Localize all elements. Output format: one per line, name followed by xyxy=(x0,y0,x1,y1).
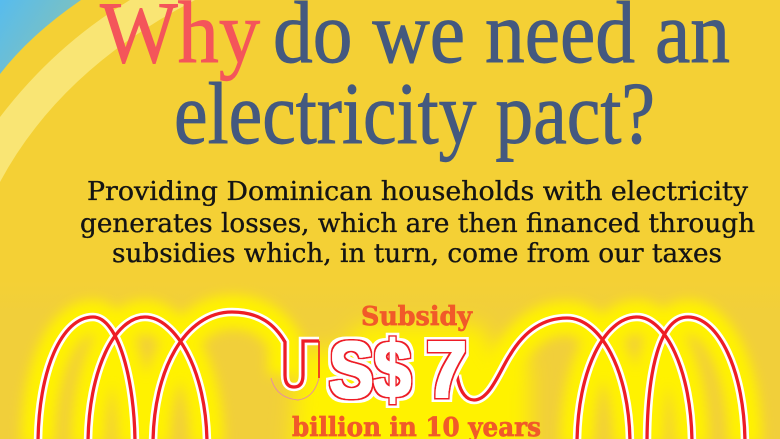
title line 2: electricity pact? xyxy=(174,66,655,163)
title xyxy=(100,0,730,163)
wire red core xyxy=(38,312,745,439)
intro line 1: Providing Dominican households with electricity xyxy=(87,177,748,207)
central glow xyxy=(290,325,530,439)
intro line 2: generates losses, which are then financed through xyxy=(80,209,755,239)
light bulb highlight band xyxy=(0,0,195,182)
subsidy figure xyxy=(292,302,541,439)
label: Subsidy: Subsidy xyxy=(361,302,473,332)
U right stem xyxy=(318,341,320,378)
filament glow xyxy=(38,312,745,439)
lower bulb background xyxy=(0,280,780,439)
intro text xyxy=(80,177,755,269)
amount: S$ 7: S$ xyxy=(329,325,411,414)
filament wire xyxy=(38,312,745,439)
wire white casing xyxy=(38,312,745,439)
thin pink arc under U xyxy=(271,378,319,400)
intro line 3: subsidies which, in turn, come from our taxes xyxy=(112,239,722,269)
sky corner xyxy=(0,0,81,74)
amount: S$ 7: 7 xyxy=(426,325,467,414)
